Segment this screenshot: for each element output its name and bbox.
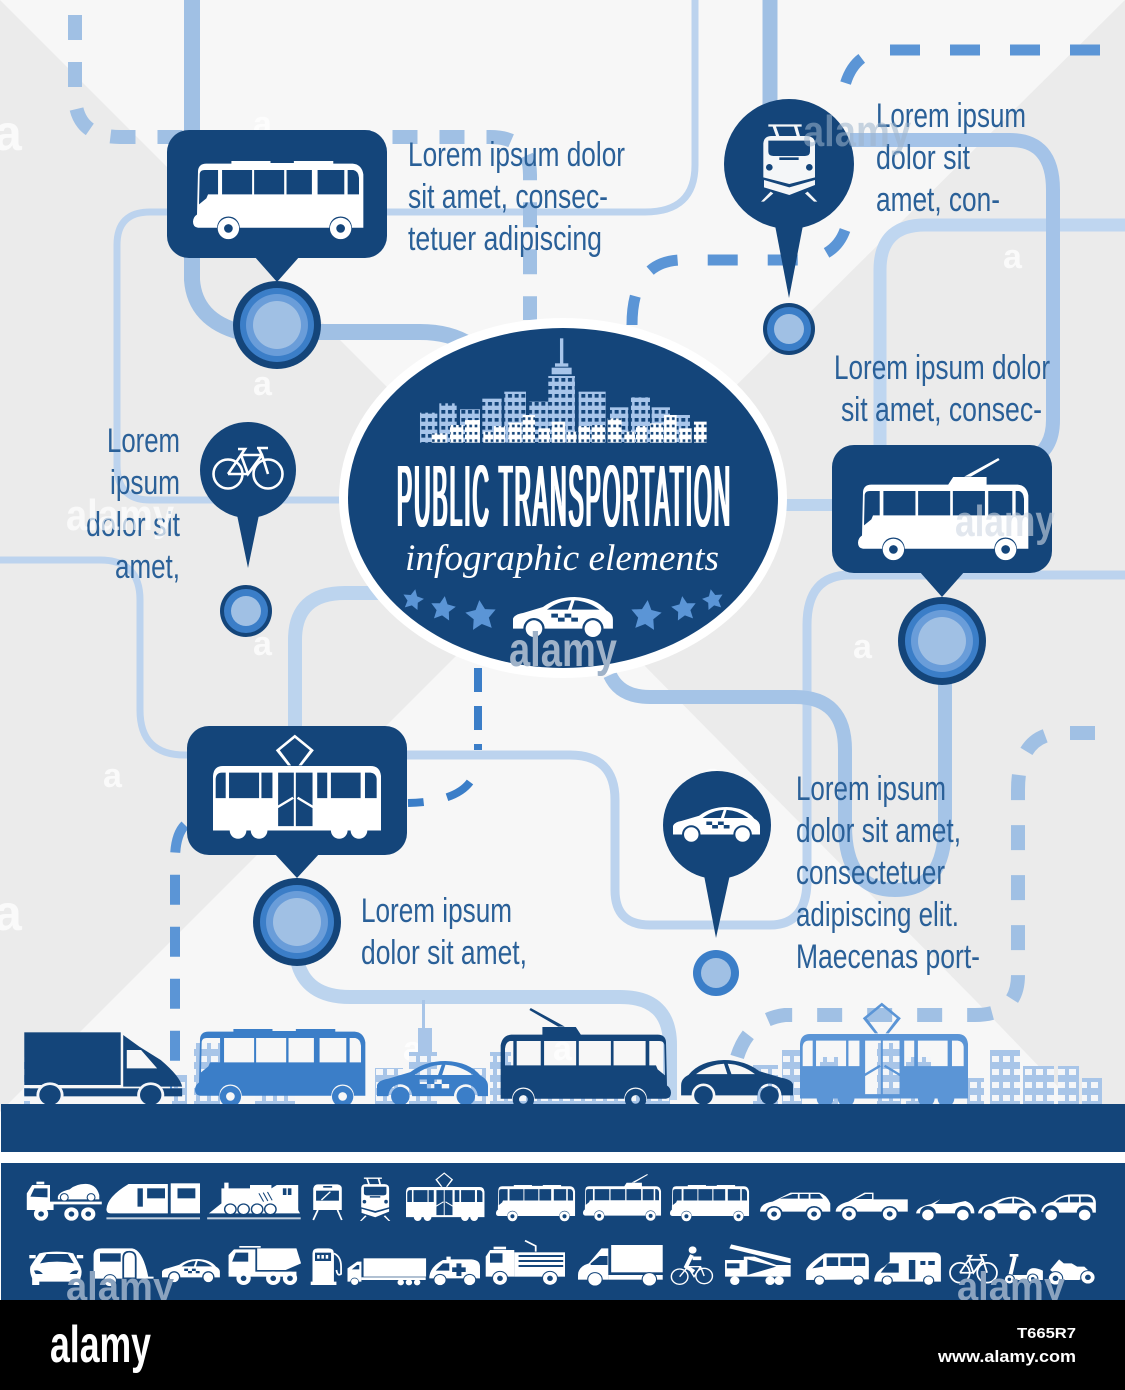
watermarks — [66, 107, 1066, 1309]
text: bicycle caption: amet, — [115, 548, 180, 586]
dashed transit routes — [75, 15, 1100, 1090]
icon: minivan — [760, 1193, 830, 1220]
faint watermark marks: a — [553, 1030, 573, 1068]
background panel — [0, 0, 1125, 1112]
text: taxi caption: dolor sit amet, — [796, 812, 961, 850]
pin: bus — [167, 130, 387, 369]
icon: coach small — [670, 1185, 749, 1221]
text: train caption: amet, con- — [876, 181, 1000, 219]
icon: cyclist — [671, 1247, 712, 1284]
city skyline strip — [24, 1000, 1102, 1104]
icon: fuel pump — [311, 1248, 341, 1285]
icon: fire truck — [486, 1241, 565, 1285]
icon: crane truck — [725, 1244, 791, 1285]
text: tram caption: dolor sit amet, — [361, 934, 527, 972]
pin: tram — [187, 726, 407, 966]
vehicle: blue bus — [195, 1029, 365, 1107]
text: bus caption: tetuer adipiscing — [408, 220, 602, 258]
text: bicycle caption: Lorem — [107, 422, 180, 460]
transit route lines — [0, 0, 1125, 1100]
icon: trolleybus small — [583, 1174, 661, 1221]
text: taxi caption: adipiscing elit. — [796, 896, 959, 934]
text: bus caption — [408, 136, 625, 258]
watermarks: alamy — [955, 497, 1055, 546]
text: bus caption: Lorem ipsum dolor — [408, 136, 625, 174]
faint watermark marks: a — [703, 757, 723, 795]
text: taxi caption: Lorem ipsum — [796, 770, 946, 808]
stars — [401, 587, 725, 630]
icon: bicycle small — [950, 1255, 997, 1283]
watermarks: alamy — [803, 107, 911, 156]
text: bicycle caption — [86, 422, 180, 586]
vehicle: light blue tram — [800, 1003, 968, 1107]
icon: bus small — [496, 1185, 575, 1221]
text: trolleybus caption: sit amet, consec- — [841, 391, 1042, 429]
vehicle: navy trolleybus — [501, 1008, 671, 1110]
icon: sedan — [978, 1197, 1036, 1220]
icon: compact van — [1041, 1194, 1096, 1220]
vehicle: delivery truck — [24, 1032, 182, 1108]
icons: left group — [27, 1182, 565, 1287]
faint watermark marks — [0, 105, 1023, 1068]
icon: truck — [347, 1258, 426, 1285]
skyline — [420, 338, 707, 443]
icon: caravan — [94, 1248, 154, 1287]
icon: scooter — [1004, 1254, 1043, 1284]
vehicle: navy car — [681, 1060, 793, 1105]
icon: ambulance — [429, 1257, 480, 1286]
vehicle: blue taxi — [377, 1061, 488, 1105]
central title badge — [339, 318, 787, 678]
faint watermark marks: a — [403, 1030, 423, 1068]
text: trolleybus caption: Lorem ipsum dolor — [834, 349, 1050, 387]
icon: taxi — [513, 597, 613, 637]
watermarks: alamy — [509, 624, 617, 677]
text: train caption: dolor sit — [876, 139, 970, 177]
icon panel — [0, 1152, 1125, 1300]
icon: cargo van — [578, 1245, 663, 1286]
icon: high-speed train — [106, 1183, 200, 1219]
text: taxi caption — [796, 770, 980, 976]
pin: bicycle — [200, 422, 296, 637]
icons: right group — [578, 1193, 1096, 1286]
faint watermark marks: a — [253, 365, 273, 403]
text: trolleybus caption — [834, 349, 1050, 429]
icon: convertible — [916, 1199, 974, 1220]
pin: trolleybus — [832, 445, 1052, 685]
icon: tow truck — [27, 1182, 102, 1221]
text: train caption: Lorem ipsum — [876, 97, 1026, 135]
text: taxi caption: Maecenas port- — [796, 938, 980, 976]
icon: motorcycle — [1048, 1259, 1095, 1285]
road band — [1, 1104, 1125, 1152]
text: train caption — [876, 97, 1026, 219]
faint watermark marks: a — [253, 105, 273, 143]
text: bicycle caption: dolor sit — [86, 506, 180, 544]
icon: taxi small — [162, 1259, 220, 1282]
pin: taxi — [663, 771, 771, 996]
icon: steam locomotive — [207, 1183, 301, 1219]
faint watermark marks: a — [253, 625, 273, 663]
text: taxi caption: consectetuer — [796, 854, 945, 892]
text: bus caption: sit amet, consec- — [408, 178, 608, 216]
icon: tram front small — [360, 1178, 390, 1221]
text blocks — [86, 97, 1050, 976]
footer url: www.alamy.com — [937, 1347, 1076, 1366]
icon: camper — [874, 1252, 941, 1285]
icon: car front — [29, 1252, 83, 1285]
icon: dump truck — [229, 1246, 301, 1285]
footer logo: alamy — [50, 1316, 151, 1374]
subtitle text: infographic elements — [405, 538, 719, 579]
icon: tram small — [406, 1172, 484, 1221]
text: tram caption — [361, 892, 527, 972]
pin: train — [724, 99, 854, 355]
watermarks: alamy — [957, 1265, 1066, 1309]
icon: minibus — [806, 1253, 869, 1285]
text: tram caption: Lorem ipsum — [361, 892, 512, 930]
faint watermark marks: a — [103, 757, 123, 795]
watermarks: alamy — [66, 491, 174, 540]
title text: PUBLIC TRANSPORTATION — [397, 448, 730, 545]
text: bicycle caption: ipsum — [110, 464, 180, 502]
icon: pickup — [836, 1193, 908, 1220]
footer bar — [0, 1300, 1125, 1390]
faint watermark marks: a — [1003, 238, 1023, 276]
faint watermark marks: a — [853, 628, 873, 666]
watermarks: alamy — [66, 1265, 175, 1309]
footer image id: T665R7 — [1017, 1325, 1076, 1342]
icon: metro train front — [313, 1184, 342, 1220]
